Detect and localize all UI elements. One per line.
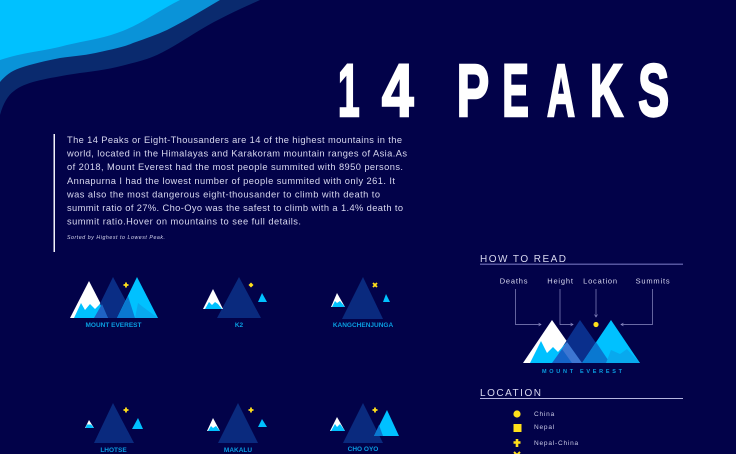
peak: Lhotse <box>85 403 143 454</box>
intro text block <box>54 134 407 252</box>
intro text block: Sorted by Highest to Lowest Peak. <box>67 235 165 241</box>
location legend <box>480 388 683 454</box>
Nepal <box>514 424 555 432</box>
peak: K2: K2 <box>235 322 244 329</box>
peak: Kangchenjunga <box>331 277 393 329</box>
next legend icon, cut off by page edge <box>514 452 520 454</box>
legend mountain <box>523 320 640 363</box>
location dot <box>593 322 599 327</box>
Nepal-China <box>514 439 579 447</box>
title: A <box>547 50 575 132</box>
field labels: Location <box>583 276 618 286</box>
title: P <box>457 50 489 133</box>
title: E <box>502 49 529 132</box>
Nepal: Nepal <box>534 424 555 431</box>
China <box>513 410 555 418</box>
field labels: Height <box>547 276 574 286</box>
intro text block: summit ratio.Hover on mountains to see full details. <box>67 217 301 227</box>
peak: Cho Oyo: CHO OYO <box>348 446 378 453</box>
intro text block: summit ratio of 27%. Cho-Oyo was the safest to climb with a 1.4% death to <box>67 203 403 213</box>
peak: Kangchenjunga: KANGCHENJUNGA <box>333 322 393 329</box>
peak: Cho Oyo <box>330 403 399 453</box>
leader arrows <box>516 289 652 326</box>
peak: Mount Everest <box>70 277 158 329</box>
peak: K2 <box>203 277 267 329</box>
how to read panel <box>480 254 683 375</box>
intro text block: of 2018, Mount Everest had the most people summited with 8950 persons. <box>67 162 403 172</box>
title: K <box>590 50 623 133</box>
China: China <box>534 411 555 418</box>
intro text block: The 14 Peaks or Eight-Thousanders are 14 of the highest mountains in the <box>67 135 402 145</box>
Nepal-China: Nepal-China <box>534 440 579 447</box>
title <box>338 49 669 133</box>
legend mountain name: MOUNT EVEREST <box>542 369 623 375</box>
location heading: LOCATION <box>480 388 541 399</box>
field labels <box>500 276 670 286</box>
intro text block: was also the most dangerous eight-thousander to climb with death to <box>66 189 380 199</box>
header waves <box>0 0 260 115</box>
field labels: Deaths <box>500 276 528 286</box>
intro text block: world, located in the Himalayas and Karakoram mountain ranges of Asia.As <box>66 149 407 159</box>
peak: Makalu <box>207 403 267 454</box>
how to read heading: HOW TO READ <box>480 254 566 265</box>
title: 4 <box>382 49 414 132</box>
title: 1 <box>338 49 360 132</box>
peak: Lhotse: LHOTSE <box>100 447 127 454</box>
intro text block: Annapurna I had the lowest number of people summited with only 261. It <box>67 176 395 186</box>
field labels: Summits <box>636 276 670 286</box>
title: S <box>638 50 669 133</box>
peak: Makalu: MAKALU <box>224 447 252 454</box>
peak: Mount Everest: MOUNT EVEREST <box>86 322 142 329</box>
